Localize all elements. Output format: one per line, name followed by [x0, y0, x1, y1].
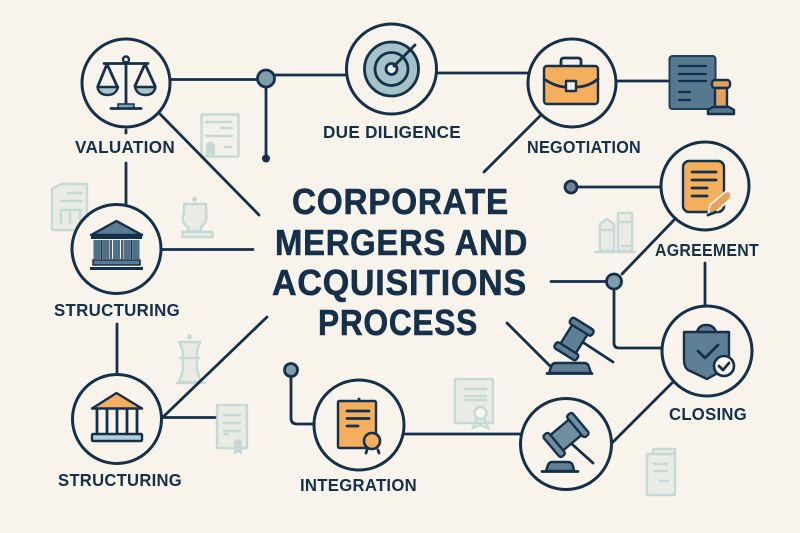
icon: briefcase: [544, 58, 598, 104]
label: structuring lower: STRUCTURING: [58, 470, 182, 490]
connector lines: [117, 73, 705, 443]
node: gavel: [520, 398, 612, 490]
icon: document and pen: [683, 161, 731, 215]
title: PROCESS: [318, 302, 478, 343]
icon: target: [364, 42, 418, 96]
node: agreement: [655, 142, 759, 260]
ghost icon: books: [595, 213, 635, 252]
icon: document with stamp: [670, 56, 734, 114]
icon: orange roof bank: [92, 393, 142, 441]
ghost icon: stacked pages: [647, 449, 675, 495]
label: structuring upper: STRUCTURING: [54, 300, 180, 320]
label: due diligence: DUE DILIGENCE: [323, 122, 461, 142]
ghost icon: urn: [182, 196, 212, 237]
title: CORPORATE: [292, 181, 509, 222]
ghost icon: chess piece: [177, 334, 205, 383]
node: structuring lower: [58, 374, 182, 490]
junction nodes: [258, 70, 622, 376]
node: closing: [662, 306, 752, 424]
node: integration: [300, 380, 417, 495]
title: MERGERS AND: [275, 222, 528, 263]
icon: gavel: [542, 412, 593, 472]
label: agreement: AGREEMENT: [655, 240, 759, 260]
label: negotiation: NEGOTIATION: [527, 137, 641, 157]
ghost icon: certificate bottom: [455, 379, 493, 428]
node: valuation: [75, 39, 175, 157]
label: integration: INTEGRATION: [300, 475, 417, 495]
label: valuation: VALUATION: [75, 137, 175, 157]
title: [272, 181, 528, 343]
node: structuring upper: [54, 204, 180, 320]
icon: bank: [90, 221, 143, 270]
label: closing: CLOSING: [669, 404, 747, 424]
icon: certificate with seal: [338, 399, 380, 453]
ghost icon: diploma: [217, 405, 247, 455]
icon: shield with check: [684, 325, 734, 379]
node: due diligence: [323, 24, 461, 142]
node: negotiation: [527, 39, 641, 157]
title: ACQUISITIONS: [272, 262, 527, 303]
ghost icon: document left: [52, 184, 87, 230]
ghost icon: certificate top left: [202, 114, 238, 157]
icon: central gavel: [547, 317, 613, 374]
icon: scales: [98, 56, 156, 108]
